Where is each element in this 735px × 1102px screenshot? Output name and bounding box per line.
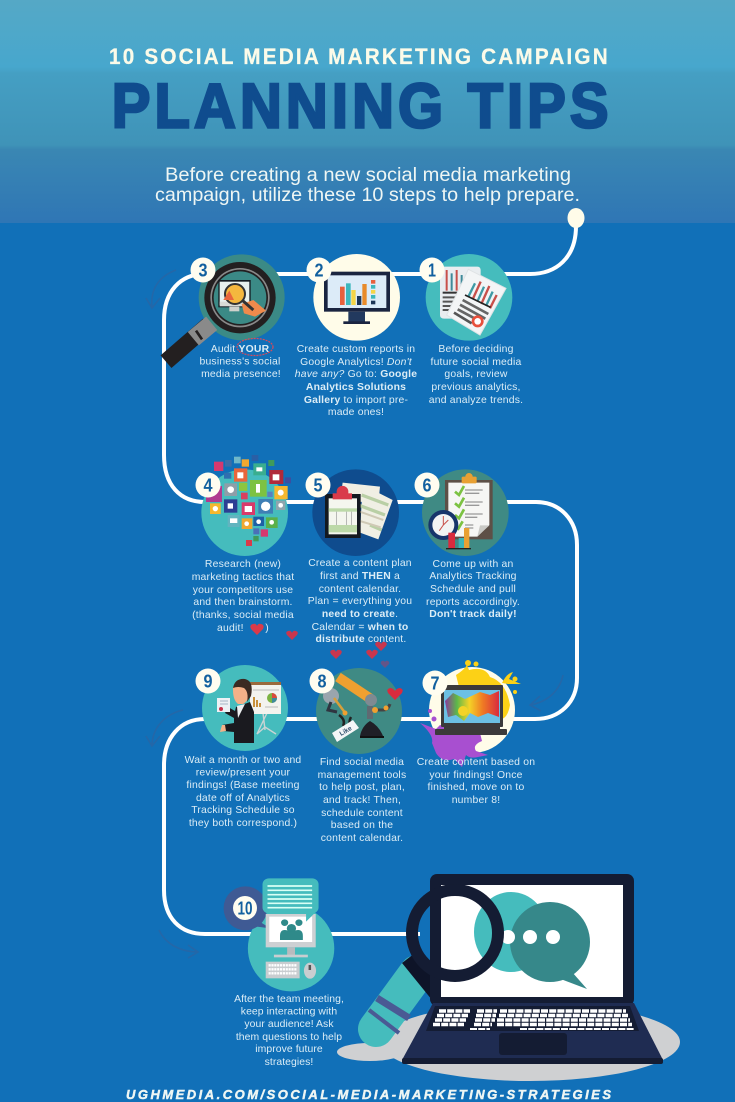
text: step 3: Audit YOUR xyxy=(211,344,269,355)
intro text xyxy=(155,164,580,206)
large laptop illustration xyxy=(337,874,680,1081)
text: step 7: Create content based on xyxy=(417,757,535,768)
text: step 7: finished, move on to xyxy=(428,782,525,793)
badge 6: 6 xyxy=(422,476,432,496)
icon: clipboard and calendar xyxy=(312,469,399,556)
text: step 10: keep interacting with xyxy=(241,1006,337,1018)
text: step 2: made ones! xyxy=(328,407,384,418)
badge 8 xyxy=(310,668,334,694)
step 8 xyxy=(310,668,406,844)
text: step 9: findings! (Base meeting xyxy=(186,780,300,791)
text: step 4: marketing tactics that xyxy=(192,572,294,583)
icon: robot arm xyxy=(316,668,403,754)
step 7 xyxy=(417,660,535,806)
badge 4: 4 xyxy=(204,476,212,496)
text: step 9: Tracking Schedule so xyxy=(191,805,295,816)
badge 1 xyxy=(420,258,444,282)
footer url: UGHMEDIA.COM/SOCIAL-MEDIA-MARKETING-STRATEGIES xyxy=(126,1087,611,1102)
text: step 5: content calendar. xyxy=(319,584,401,595)
text: step 4: (thanks, social media xyxy=(192,610,294,621)
text: step 8: Find social media xyxy=(320,757,404,768)
badge 4 xyxy=(196,472,220,498)
icon: heart xyxy=(250,624,264,635)
text: step 1: goals, review xyxy=(444,369,508,380)
title: main heading: PLANNING TIPS xyxy=(112,70,609,141)
text: step 2: Analytics Solutions xyxy=(306,382,406,393)
step 2 xyxy=(295,254,417,418)
text: step 7: your findings! Once xyxy=(429,770,523,781)
icon: robot arm: Like xyxy=(338,725,354,738)
intro text: campaign, utilize these 10 steps to help prepare. xyxy=(155,184,580,206)
text: step 6: Come up with an xyxy=(433,559,513,570)
text: step 2: Google Analytics! Don't xyxy=(300,357,412,368)
text: step 9: date off of Analytics xyxy=(196,793,290,804)
text: step 10: your audience! Ask xyxy=(244,1019,334,1030)
text: step 5: first and THEN a xyxy=(320,571,400,582)
text: step 5: distribute content. xyxy=(315,634,407,645)
text: step 3: media presence! xyxy=(201,369,281,380)
badge 10: 10 xyxy=(238,898,252,918)
text: step 8: and track! Then, xyxy=(323,795,401,806)
speech bubbles xyxy=(474,892,590,989)
text: step 8: content calendar. xyxy=(321,833,403,844)
step 3 xyxy=(166,254,285,380)
badge 7: 7 xyxy=(430,674,440,694)
floating hearts xyxy=(286,631,389,668)
text: step 5: Plan = everything you xyxy=(308,596,412,607)
icon: app icon cloud xyxy=(201,455,291,556)
header band xyxy=(0,0,735,223)
text: step 1: previous analytics, xyxy=(431,382,521,393)
icon: magnifier over monitor xyxy=(166,254,285,362)
text: step 5: need to create. xyxy=(322,609,398,620)
step 6 xyxy=(414,469,520,620)
grey shadow xyxy=(337,1003,680,1081)
icon: presenter with chart board xyxy=(202,665,288,751)
step 10 xyxy=(224,878,344,1068)
icon: laptop with paint splashes xyxy=(420,660,521,767)
text: step 6: Analytics Tracking xyxy=(429,571,517,582)
text: step 1: future social media xyxy=(430,357,522,368)
badge 6 xyxy=(414,472,440,498)
badge 10 xyxy=(233,896,257,920)
text: step 9: Wait a month or two and xyxy=(185,755,301,766)
step 1 xyxy=(420,254,523,406)
text: step 4: audit! ) xyxy=(217,623,269,634)
text: step 9: they both correspond.) xyxy=(189,818,297,829)
badge 2 xyxy=(306,258,332,282)
text: step 8: schedule content xyxy=(321,808,403,819)
text: step 5: Create a content plan xyxy=(308,558,412,569)
text: step 6: Schedule and pull xyxy=(430,584,516,595)
text: step 8: based on the xyxy=(331,820,393,831)
text: step 3: business's social xyxy=(199,356,281,368)
text: step 2: have any? Go to: Google xyxy=(295,369,417,380)
badge 2: 2 xyxy=(314,260,324,280)
text: step 4: and then brainstorm. xyxy=(193,597,293,608)
icon: clipboard, clock and bars xyxy=(422,469,509,556)
badge 9: 9 xyxy=(204,672,212,692)
path start dot xyxy=(568,208,584,228)
text: step 9: review/present your xyxy=(196,768,291,778)
text: step 2: Create custom reports in xyxy=(297,344,415,355)
text: step 6: reports accordingly. xyxy=(426,597,520,608)
laptop base and keyboard xyxy=(402,1003,663,1064)
step 9 xyxy=(185,665,301,829)
icon: monitor and team chat xyxy=(224,878,334,991)
icon: monitor with bar chart xyxy=(313,254,400,341)
title: subtitle line: 10 SOCIAL MEDIA MARKETING CAMPAIGN xyxy=(109,43,608,69)
step 4 xyxy=(192,455,294,635)
text: step 4: Research (new) xyxy=(205,559,281,570)
text: step 10: them questions to help xyxy=(236,1032,342,1043)
text: step 10: improve future xyxy=(255,1044,323,1055)
badge 8: 8 xyxy=(318,672,326,692)
text: step 7: number 8! xyxy=(452,795,500,806)
magnifier handle xyxy=(369,950,447,1033)
text: step 10: strategies! xyxy=(265,1057,313,1068)
winding path xyxy=(164,226,577,934)
text: step 1: and analyze trends. xyxy=(429,395,523,406)
text: step 1: Before deciding xyxy=(438,344,514,355)
text: step 8: management tools xyxy=(318,770,406,781)
oval around YOUR xyxy=(237,338,273,356)
badge 7 xyxy=(422,670,448,696)
laptop screen xyxy=(430,874,634,1006)
badge 5: 5 xyxy=(314,476,322,496)
step 5 xyxy=(306,469,412,645)
text: step 2: Gallery to import pre- xyxy=(304,395,408,406)
text: step 6: Don't track daily! xyxy=(429,609,517,620)
text: step 8: to help post, plan, xyxy=(319,782,405,793)
text: step 10: After the team meeting, xyxy=(234,994,344,1005)
text: step 4: your competitors use xyxy=(193,585,293,596)
text: step 5: Calendar = when to xyxy=(312,622,408,633)
badge 1: 1 xyxy=(428,260,436,280)
icon: analytics reports xyxy=(426,254,512,341)
magnifier ring xyxy=(412,890,498,976)
badge 5 xyxy=(306,472,330,498)
faint curved arrows xyxy=(146,270,563,958)
badge 9 xyxy=(196,668,220,694)
badge 3: 3 xyxy=(198,260,208,280)
intro text: Before creating a new social media marketing xyxy=(165,164,571,186)
